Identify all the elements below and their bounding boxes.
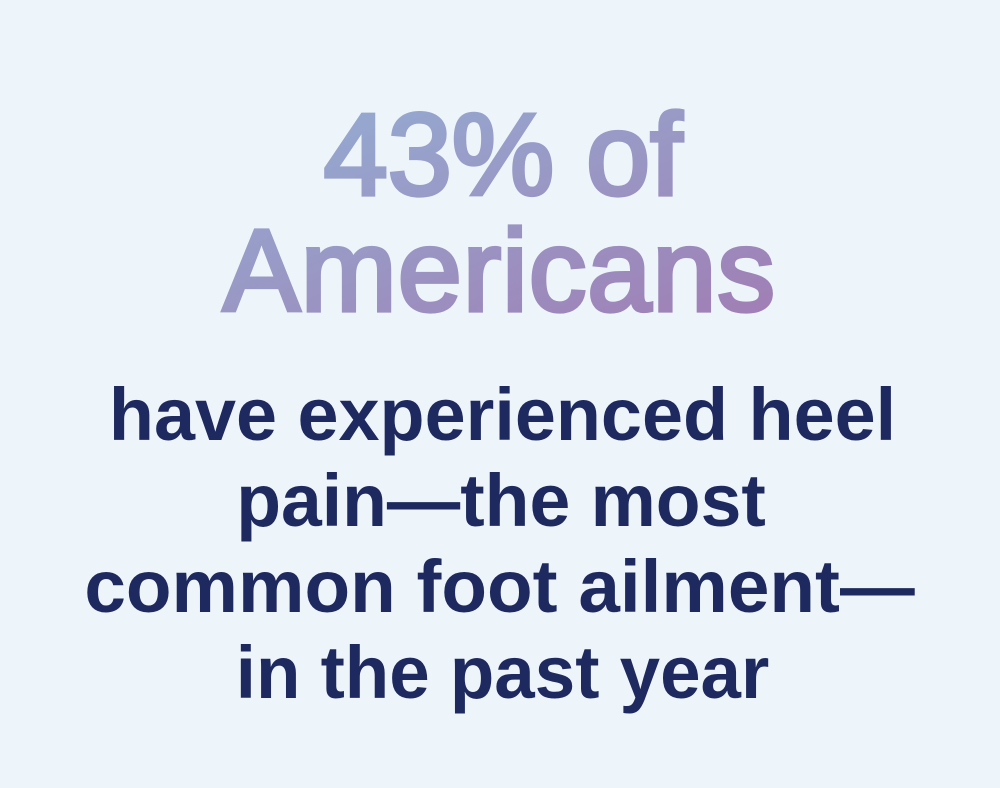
body statement: heel pain: in the past year	[236, 631, 769, 714]
body statement: heel pain	[84, 373, 915, 714]
body statement: heel pain: common foot ailment—	[84, 545, 915, 628]
headline: 43% of Americans	[223, 90, 776, 336]
headline: 43% of Americans: Americans	[223, 206, 776, 336]
body statement: heel pain: pain—the most	[236, 459, 766, 542]
headline: 43% of Americans: 43% of	[324, 90, 683, 220]
body statement: heel pain: have experienced heel	[109, 373, 896, 456]
